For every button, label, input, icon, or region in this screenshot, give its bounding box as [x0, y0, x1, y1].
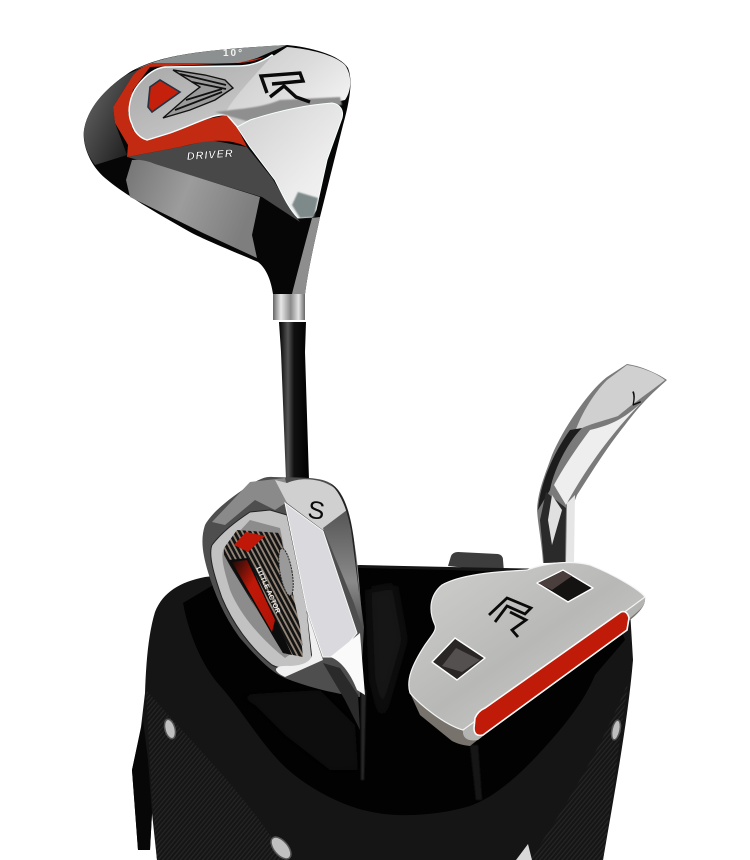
- putter front hole inner wall: [442, 648, 480, 672]
- driver red band: [113, 57, 265, 157]
- driver crown dark reflection: [215, 97, 342, 122]
- iron hosel: [540, 492, 566, 563]
- club: seven iron: [537, 364, 667, 563]
- driver vent lines: [175, 74, 226, 110]
- driver sole grey panel: [126, 160, 260, 258]
- bag back tab: [448, 552, 504, 572]
- putter rear hole inner wall: [538, 571, 572, 590]
- driver lit crown: [237, 103, 343, 218]
- bag strap: [132, 720, 152, 850]
- rivet: bottom right: [516, 844, 532, 860]
- driver heel reflection: [292, 192, 318, 218]
- iron number: 7: [625, 385, 643, 409]
- putter bevel: [463, 597, 645, 741]
- wedge toe reflection: [330, 633, 365, 695]
- wedge head body: [202, 477, 364, 697]
- wedge lower frame highlight: [276, 612, 323, 677]
- bag body: [132, 565, 633, 860]
- bag inner divider: [235, 690, 358, 770]
- driver logo: [261, 73, 310, 102]
- wedge label: LITTLE ACTOR: [254, 566, 281, 615]
- bag inner pit: [183, 568, 625, 815]
- bag lower right textured panel: [530, 682, 628, 860]
- putter red insert: [474, 612, 629, 735]
- driver top strip with loft: [135, 45, 287, 70]
- club: mallet putter: [409, 563, 645, 746]
- wedge frame: [211, 510, 312, 669]
- rivet: bottom left: [267, 834, 295, 860]
- wedge number: S: [306, 496, 326, 526]
- bag inner centre fold: [368, 585, 405, 720]
- rivet: left: [163, 718, 177, 740]
- wedge red stripe: [232, 560, 275, 632]
- driver neck highlight: [292, 217, 320, 294]
- driver vent outline: [163, 70, 233, 118]
- wedge hosel shaft in bag: [361, 690, 366, 780]
- wedge upper blade: [275, 479, 347, 530]
- iron hosel highlight: [548, 495, 562, 545]
- rivet: right: [610, 719, 622, 741]
- putter shaft in bag: [470, 745, 482, 800]
- wedge black band: [228, 558, 292, 655]
- iron bright top: [575, 365, 665, 432]
- wedge cavity: [222, 520, 303, 658]
- driver shaft: [279, 322, 309, 480]
- putter rear hole: [537, 570, 593, 602]
- driver chrome lobe: [129, 55, 300, 140]
- iron bright face: [554, 402, 642, 505]
- driver left shading: [84, 63, 153, 165]
- iron head: [537, 364, 667, 563]
- wedge hosel dark: [323, 663, 360, 730]
- driver loft text: 10°: [223, 48, 244, 59]
- putter underside: [410, 597, 645, 746]
- iron hosel right edge: [566, 495, 575, 562]
- wedge red section: [234, 532, 265, 552]
- wedge blade dark edge: [323, 510, 363, 630]
- wedge ribbed oval: [276, 547, 296, 597]
- wedge top shading: [212, 478, 290, 525]
- club: driver: [84, 45, 350, 480]
- putter front hole: [432, 638, 485, 680]
- wedge right rim: [330, 483, 360, 600]
- wedge insert: [224, 530, 303, 657]
- putter logo: [489, 598, 531, 637]
- driver lower dark panel: [127, 140, 300, 222]
- driver crest: [148, 80, 180, 112]
- driver label: DRIVER: [186, 148, 233, 163]
- putter top plate: [409, 563, 645, 730]
- driver ferrule: [273, 294, 305, 320]
- driver head body: [84, 45, 350, 294]
- driver upper crown: [225, 47, 350, 118]
- golf bag: [132, 552, 633, 860]
- wedge lit blade: [285, 503, 357, 657]
- bag lower left textured panel: [146, 690, 283, 860]
- iron dark edge: [538, 428, 582, 510]
- club: sand wedge: [202, 477, 365, 730]
